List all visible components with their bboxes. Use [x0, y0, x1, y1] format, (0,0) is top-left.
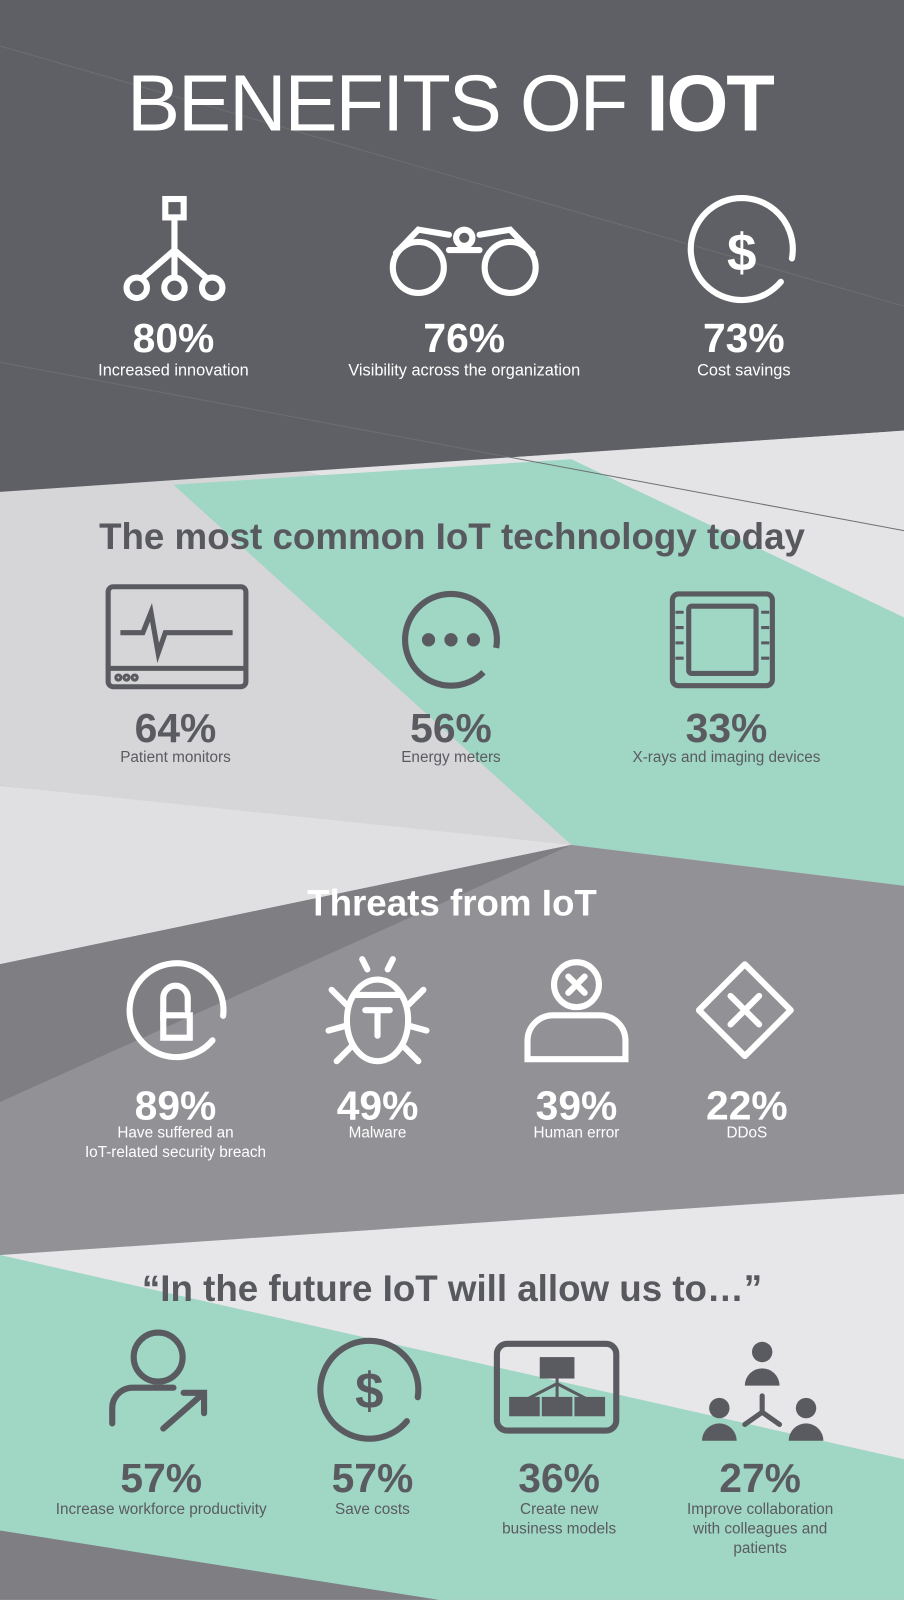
icon: dollar circle [670, 177, 814, 321]
heading: most common IoT technology: The most common IoT technology today [99, 516, 805, 557]
stat: 57% workforce: 57% [120, 1455, 202, 1501]
stat: 49%: 49% [337, 1082, 418, 1128]
stat: 76%: 76% [423, 315, 505, 361]
stat: 57% workforce [56, 1455, 267, 1518]
stat: 57% costs: 57% [332, 1455, 413, 1501]
stat: 57% costs: Save costs [335, 1501, 410, 1518]
panel: threats [110, 944, 791, 1076]
stat: 80%: 80% [133, 315, 214, 361]
icon: human error [528, 962, 625, 1059]
stat: 36%: 36% [518, 1455, 600, 1501]
stat: 89%: 89% [135, 1082, 216, 1128]
stat: 36% [502, 1455, 616, 1538]
icon: productivity [112, 1333, 204, 1429]
icon: network [127, 199, 222, 298]
stat: 56%: Energy meters [401, 749, 501, 766]
heading: future: “In the future IoT will allow us to…” [142, 1268, 762, 1309]
icon: business model [497, 1344, 616, 1431]
icon: save costs [300, 1321, 438, 1459]
stat: 33%: X-rays and imaging devices [633, 749, 821, 766]
panel: future [112, 1321, 823, 1459]
stat: 22%: 22% [706, 1082, 788, 1128]
stat: 76% [348, 315, 580, 380]
stat: 36%: business models [502, 1521, 616, 1538]
stat: 22%: DDoS [726, 1125, 767, 1142]
stat: 80% [98, 315, 249, 380]
icon: save costs: $ [355, 1362, 384, 1419]
stat: 80%: Increased innovation [98, 362, 249, 380]
stat: 27%: Improve collaboration [687, 1501, 833, 1518]
stat: 73%: Cost savings [697, 362, 791, 380]
stat: 89%: Have suffered an [117, 1125, 234, 1142]
icon: energy meter [386, 575, 516, 705]
stat: 36%: Create new [520, 1501, 599, 1518]
panel: benefits [127, 177, 814, 321]
icon: film/x-ray [672, 594, 772, 686]
stat: 64%: Patient monitors [120, 749, 231, 766]
stat: 39%: Human error [534, 1125, 619, 1142]
stat: 76%: Visibility across the organization [348, 362, 580, 380]
stat: 64% [120, 705, 231, 766]
stat: 33% [633, 705, 821, 766]
stat: 27%: with colleagues and [692, 1521, 827, 1538]
icon: dollar circle: $ [727, 223, 757, 282]
stat: 73% [697, 315, 791, 380]
stat: 89%: IoT-related security breach [85, 1144, 266, 1161]
icon: bug [329, 959, 426, 1061]
stat: 33%: 33% [686, 705, 767, 751]
panel: common technology [108, 575, 772, 705]
stat: 27%: patients [733, 1540, 787, 1557]
title: BENEFITS OF IOT [127, 59, 774, 148]
icon: open lock [110, 944, 243, 1076]
stat: 56%: 56% [410, 705, 492, 751]
stat: 57% workforce: Increase workforce productivity [56, 1501, 267, 1518]
stat: 89% [85, 1082, 266, 1161]
icon: patient monitor [108, 587, 246, 687]
icon: ddos [699, 964, 791, 1056]
icon: collaboration [702, 1342, 823, 1441]
stat: 39%: 39% [536, 1082, 617, 1128]
heading: threats: Threats from IoT [307, 882, 597, 923]
stat: 64%: 64% [135, 705, 216, 751]
stat: 49%: Malware [349, 1125, 406, 1142]
stat: 27%: 27% [719, 1455, 801, 1501]
stat: 27% [687, 1455, 833, 1557]
stat: 73%: 73% [703, 315, 785, 361]
stat: 56% [401, 705, 501, 766]
icon: binoculars [393, 230, 536, 293]
